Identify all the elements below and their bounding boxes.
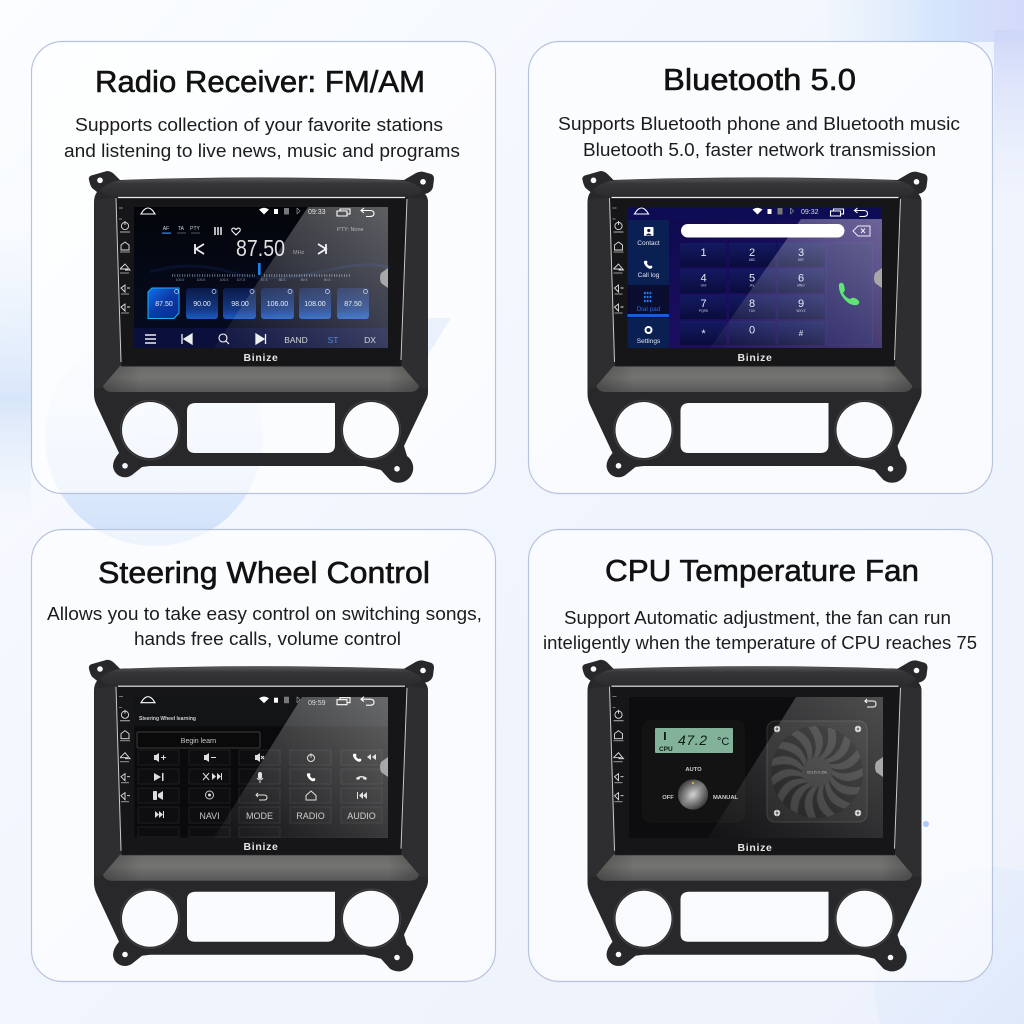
screen: radio interface: 105.5 xyxy=(197,278,205,282)
screen: radio interface: 90.5 xyxy=(324,278,330,282)
control box: temperature display and knob: MANUAL xyxy=(713,795,739,801)
screen: radio interface: 108.00 xyxy=(304,301,326,308)
screen: dial pad: Contact xyxy=(637,240,660,247)
screen: radio interface: DX xyxy=(364,335,376,345)
panel: radio receiver card xyxy=(32,42,496,494)
fan: DC12V 0.20A xyxy=(807,770,828,774)
text block: radio description: and listening to live news, music and programs xyxy=(64,140,460,161)
screen: radio interface: AF xyxy=(163,226,169,232)
screen: radio interface: ST xyxy=(328,335,338,345)
screen: radio interface xyxy=(134,207,390,348)
screen: radio interface: 87.5 xyxy=(261,278,267,282)
panel: bluetooth card xyxy=(528,42,992,494)
screen: steering wheel learning: Begin learn xyxy=(181,738,216,745)
screen: dial pad: # xyxy=(799,329,804,338)
text block: steering description xyxy=(47,603,482,649)
screen: radio interface: 87.50 xyxy=(236,235,285,261)
logo: Binize: Binize xyxy=(243,841,279,853)
panel: steering wheel card xyxy=(32,530,496,982)
screen: dial pad: Call log xyxy=(638,272,660,279)
head unit: bluetooth xyxy=(582,171,928,483)
screen: dial pad: 6 xyxy=(798,272,804,284)
screen: dial pad: 3 xyxy=(798,247,804,259)
screen: radio interface: TA xyxy=(178,226,185,232)
screen: radio interface: PTY xyxy=(190,226,201,232)
screen: radio interface: 87.50 xyxy=(155,301,173,308)
screen: radio interface: 90.00 xyxy=(193,301,211,308)
screen: dial pad: WXYZ xyxy=(796,309,806,313)
screen: dial pad: 09:32 xyxy=(801,209,819,216)
text block: cpu description: inteligently when the temperature of CPU reaches 75 xyxy=(543,632,977,653)
heading: steering wheel: Steering Wheel Control xyxy=(98,555,430,590)
head unit: cpu fan xyxy=(582,660,928,971)
text block: cpu description xyxy=(543,607,977,653)
screen: radio interface: 89.5 xyxy=(301,278,307,282)
fan xyxy=(767,721,867,822)
screen: radio interface: 88.5 xyxy=(279,278,285,282)
text block: steering description: hands free calls, volume control xyxy=(134,628,401,649)
text block: bluetooth description: Bluetooth 5.0, faster network transmission xyxy=(583,139,936,160)
screen: dial pad: GHI xyxy=(701,284,706,288)
screen: steering wheel learning: MODE xyxy=(246,811,273,821)
logo: Binize: Binize xyxy=(243,352,279,364)
screen: steering wheel learning: 09:59 xyxy=(308,700,326,707)
screen: radio interface: 106.00 xyxy=(267,301,288,308)
control box: temperature display and knob: OFF xyxy=(662,795,674,801)
control box: temperature display and knob: AUTO xyxy=(685,767,702,773)
screen: steering wheel learning: NAVI xyxy=(199,811,220,821)
screen: radio interface: 09:33 xyxy=(308,209,326,216)
control box: temperature display and knob xyxy=(642,720,745,823)
icons: steering control buttons xyxy=(153,753,376,818)
screen: dial pad: DEF xyxy=(798,258,804,262)
screen: radio interface: 107.5 xyxy=(237,278,245,282)
screen: fan control xyxy=(629,697,883,838)
text block: radio description: Supports collection of your favorite stations xyxy=(75,114,443,135)
screen: dial pad: 0 xyxy=(749,324,755,336)
text block: cpu description: Support Automatic adjustment, the fan can run xyxy=(564,607,951,628)
icon: green phone xyxy=(839,283,859,305)
screen: dial pad: 5 xyxy=(749,272,755,284)
screen: dial pad: 9 xyxy=(798,298,804,310)
screen: dial pad: 7 xyxy=(700,298,707,310)
text block: radio description xyxy=(64,114,460,161)
logo: Binize: Binize xyxy=(737,352,773,364)
screen: radio interface: 87.50 xyxy=(344,301,362,308)
screen: radio interface: 106.5 xyxy=(220,278,228,282)
screen: dial pad xyxy=(628,207,882,348)
screen: radio interface: 106.5 xyxy=(176,278,184,282)
head unit: radio xyxy=(89,171,434,483)
control box: temperature display and knob: CPU xyxy=(659,746,673,753)
screen: dial pad: Settings xyxy=(637,338,661,345)
text block: steering description: Allows you to take easy control on switching songs, xyxy=(47,603,482,624)
screen: dial pad: TUV xyxy=(749,309,756,313)
control box: temperature display and knob: °C xyxy=(717,736,729,748)
icon: dial pad grid xyxy=(644,293,652,301)
screen: steering wheel learning: AUDIO xyxy=(347,811,376,821)
screen: radio interface: BAND xyxy=(284,335,308,345)
screen: dial pad: * xyxy=(701,328,706,340)
screen: dial pad: ABC xyxy=(749,258,756,262)
head unit: steering xyxy=(89,660,434,971)
screen: dial pad: 8 xyxy=(749,298,755,310)
screen: steering wheel learning xyxy=(134,696,388,838)
heading: bluetooth: Bluetooth 5.0 xyxy=(663,62,856,97)
screen: dial pad: 4 xyxy=(700,272,707,284)
screen: dial pad: PQRS xyxy=(699,309,708,313)
screen: steering wheel learning: RADIO xyxy=(296,811,325,821)
screen: dial pad: JKL xyxy=(749,284,755,288)
icon: contact xyxy=(644,227,654,236)
screen: dial pad: MNO xyxy=(797,284,805,288)
screen: dial pad: 2 xyxy=(749,247,755,259)
panel: cpu fan card xyxy=(528,530,992,982)
heading: cpu fan: CPU Temperature Fan xyxy=(605,553,919,588)
screen: dial pad: 1 xyxy=(700,247,707,259)
screen: radio interface: MHz xyxy=(293,250,305,256)
text block: bluetooth description xyxy=(558,113,960,160)
control box: temperature display and knob: 47.2 xyxy=(678,732,707,748)
screen: radio interface: PTY: None xyxy=(337,227,364,233)
screen: dial pad: Dial pad xyxy=(637,306,661,313)
text block: bluetooth description: Supports Bluetooth phone and Bluetooth music xyxy=(558,113,960,134)
screen: radio interface: 98.00 xyxy=(231,301,249,308)
screen: steering wheel learning: Steering Wheel learning xyxy=(139,716,196,722)
logo: Binize: Binize xyxy=(737,842,773,854)
heading: radio receiver: Radio Receiver: FM/AM xyxy=(95,64,425,99)
